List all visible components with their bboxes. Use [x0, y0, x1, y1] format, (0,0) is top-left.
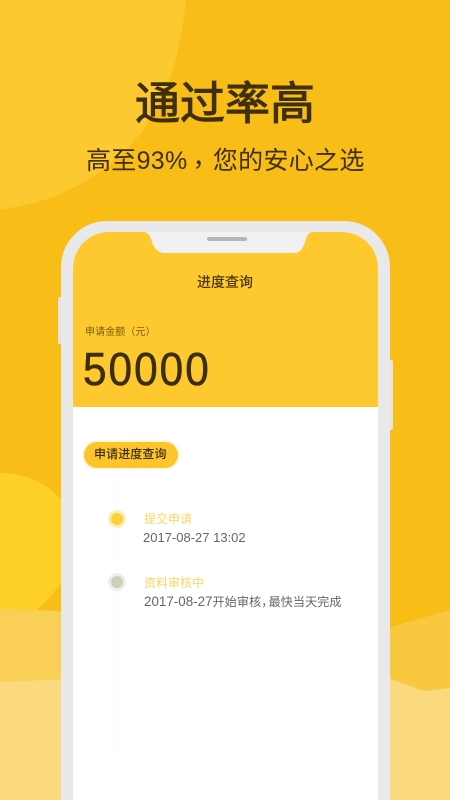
speaker [207, 237, 247, 241]
screen title: 进度查询 [197, 274, 253, 290]
step 2 dot [108, 573, 126, 591]
amount value: 50000 [83, 343, 211, 395]
timeline line [117, 468, 118, 753]
step 1 time: 2017-08-27 13:02 [143, 530, 246, 545]
subtitle: 高至93%，您的安心之选 [86, 144, 365, 175]
left side button [58, 297, 62, 344]
status pill [84, 442, 178, 468]
phone body [61, 221, 390, 800]
yellow header panel [73, 232, 378, 407]
phone mockup [58, 221, 393, 800]
step 1 dot [108, 510, 126, 528]
step 2 title: 资料审核中 [144, 576, 204, 590]
title: 通过率高 [135, 78, 315, 129]
notch [144, 232, 312, 253]
amount label: 申请金额（元） [85, 327, 156, 338]
pill label: 申请进度查询 [94, 447, 167, 461]
step 2 description: 2017-08-27开始审核，最快当天完成 [144, 594, 342, 609]
right side button [389, 360, 393, 430]
step 1 title: 提交申请 [144, 512, 192, 526]
phone screen [73, 232, 378, 800]
